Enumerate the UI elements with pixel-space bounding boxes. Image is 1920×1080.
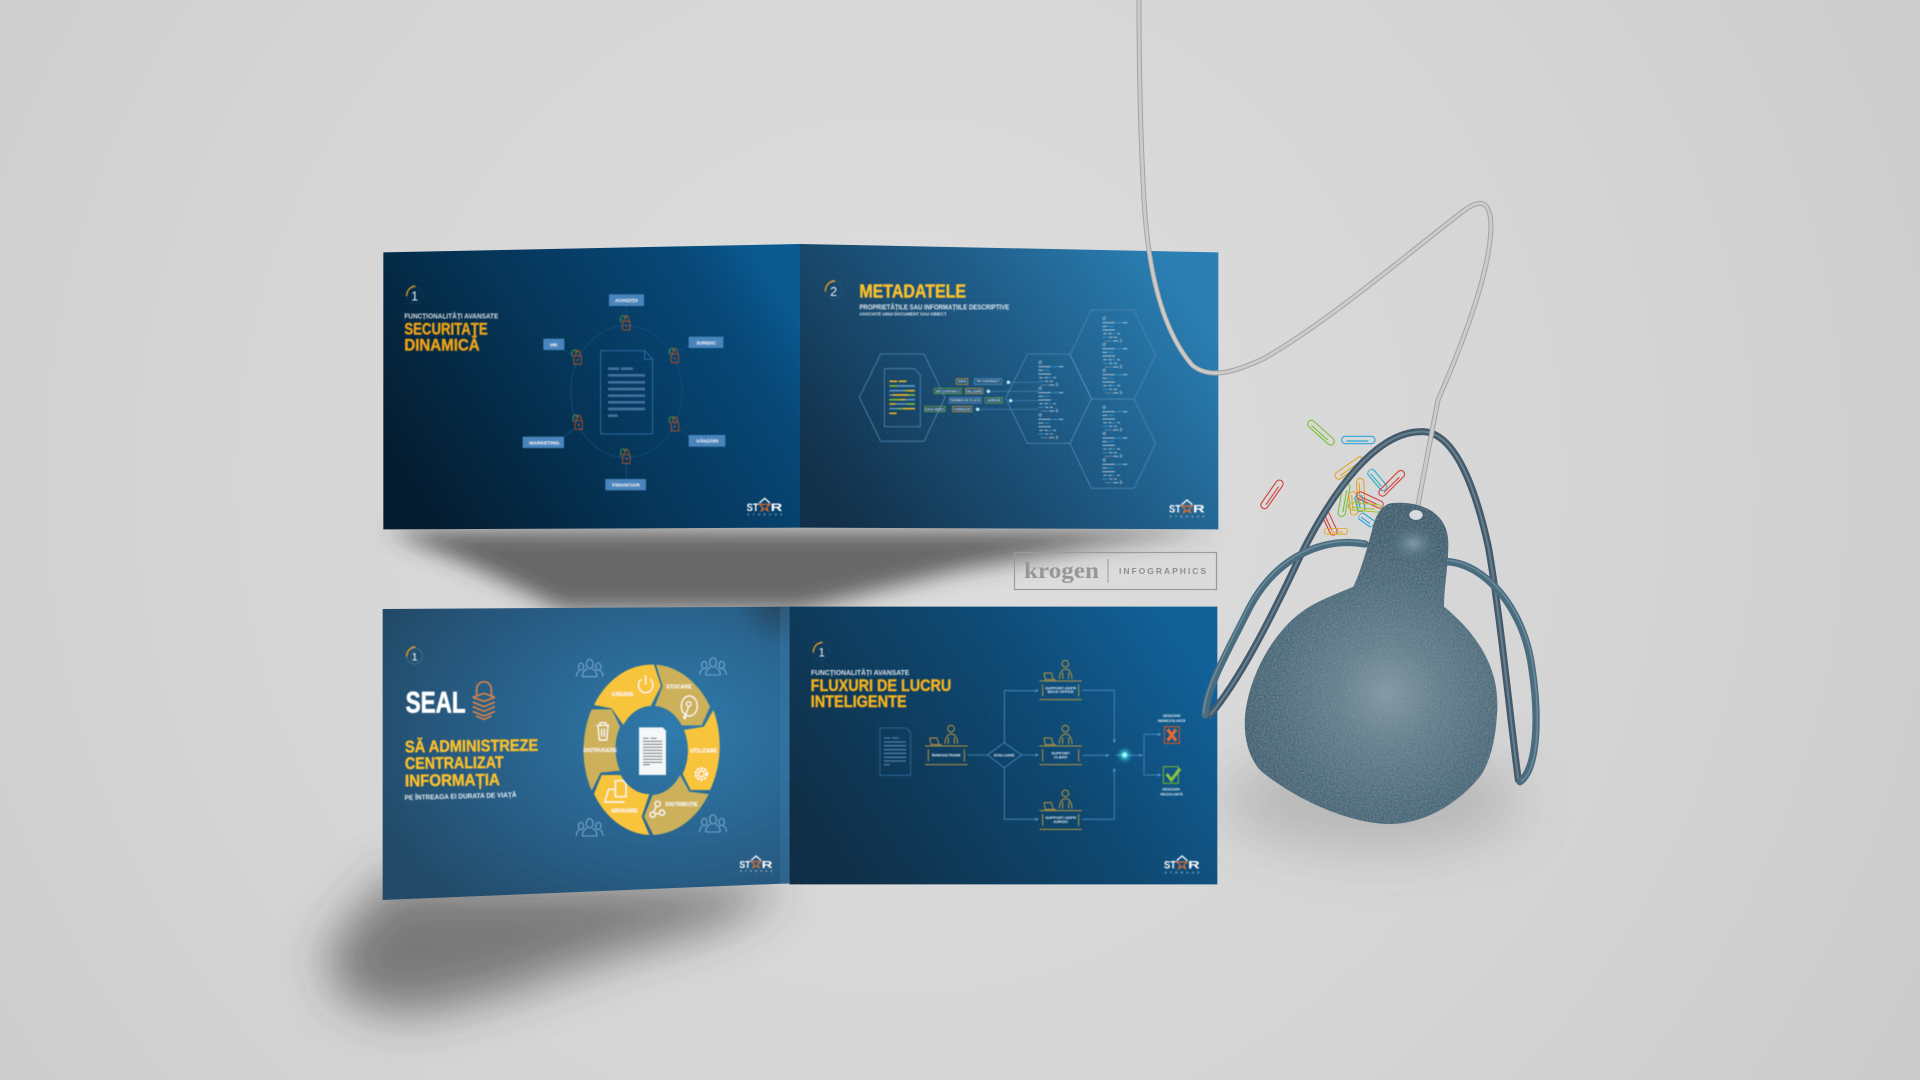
panel: metadatele xyxy=(800,244,1218,529)
flowchart: SESIZARI xyxy=(1162,787,1180,791)
number badge: 2 xyxy=(830,285,837,299)
logo: star storage: R xyxy=(1193,504,1205,516)
logo: star storage: STORAGE xyxy=(747,513,782,517)
diagram: metadata hexagons: TIP CONTRACT xyxy=(976,380,1000,384)
diagram: metadata hexagons: DATA xyxy=(958,380,967,384)
panel: securitate dinamica xyxy=(383,244,800,529)
heading: SECURITAȚE xyxy=(404,319,488,338)
chart: lifecycle ring: STOCARE xyxy=(666,684,692,690)
icon: document xyxy=(601,351,653,434)
number badge xyxy=(407,647,423,664)
icon: central document xyxy=(639,727,666,775)
icon: power xyxy=(638,675,653,693)
number badge: 1 xyxy=(412,652,418,664)
icon: gear xyxy=(696,768,707,780)
heading xyxy=(811,668,951,711)
number badge: 1 xyxy=(818,646,825,660)
heading xyxy=(404,312,498,354)
icon: disk xyxy=(681,696,697,718)
left handle xyxy=(1204,541,1365,715)
lamp xyxy=(1204,503,1537,824)
diagram: document access ring: FINANCIAR xyxy=(612,483,640,489)
heading: INTELIGENTE xyxy=(811,692,907,711)
neck highlight xyxy=(1387,523,1440,563)
logo: star storage: R xyxy=(771,502,782,514)
logo: star storage: ST xyxy=(747,502,759,514)
flowchart: ÎNREGISTRARE xyxy=(931,752,961,757)
shadow: lamp xyxy=(1220,750,1520,850)
flowchart: NEREZOLVATĂ xyxy=(1158,718,1186,723)
lamp body xyxy=(1245,503,1497,824)
panel: seal xyxy=(383,607,789,900)
socket xyxy=(1409,510,1423,520)
diagram: document access ring: HR xyxy=(550,342,558,348)
watermark: krogen infographics: INFOGRAPHICS xyxy=(1119,566,1206,576)
chart: lifecycle ring: UTILIZARE xyxy=(690,749,718,755)
icon: rejected xyxy=(1164,727,1179,743)
logo: star storage: R xyxy=(1188,860,1200,872)
flowchart: JURIDIC xyxy=(1053,820,1069,824)
logo: star storage: ST xyxy=(739,859,751,871)
diagram: metadata hexagons: DATA INDEX xyxy=(925,407,945,411)
lamp back wire xyxy=(1210,432,1518,780)
number badge xyxy=(813,642,830,660)
heading: ASOCIATE UNUI DOCUMENT SAU OBIECT xyxy=(859,312,947,317)
flowchart: BACK OFFICE xyxy=(1048,690,1074,694)
panel: fluxuri de lucru xyxy=(789,607,1217,884)
chart: lifecycle ring: DISTRIBUȚIE xyxy=(665,802,698,808)
logo: star storage xyxy=(739,856,773,873)
icons: people groups xyxy=(576,658,726,836)
flowchart: SUPPORT-GDPR xyxy=(1045,816,1076,820)
logo: star storage: STORAGE xyxy=(1165,870,1200,874)
logo: star storage: ST xyxy=(1164,860,1176,872)
icon: trash xyxy=(597,723,609,740)
logo: star storage: ST xyxy=(1169,504,1181,516)
heading: administration xyxy=(405,736,538,790)
flowchart: CLIENT xyxy=(1054,755,1068,759)
shadow: between brochures xyxy=(385,530,1218,610)
number badge xyxy=(406,286,423,304)
flowchart: SUPPORT-GDPR xyxy=(1045,686,1076,690)
heading xyxy=(859,281,1009,317)
subtitle: PE ÎNTREAGA EI DURATA DE VIAȚĂ xyxy=(404,790,517,802)
chart: lifecycle ring: CREARE xyxy=(612,692,634,698)
heading: seal: SEAL xyxy=(406,687,466,720)
heading: administration: CENTRALIZAT xyxy=(405,753,504,773)
right handle xyxy=(1447,560,1537,782)
chart: lifecycle ring: ARHIVARE xyxy=(611,809,638,815)
diagram: metadata hexagons: FURNIZOR xyxy=(954,407,971,411)
watermark: krogen infographics: krogen xyxy=(1024,558,1099,583)
paper clips xyxy=(1259,419,1406,536)
flowchart: SUPPORT xyxy=(1051,752,1071,756)
heading: PROPRIETĂȚILE SAU INFORMAȚIILE DESCRIPTIVE xyxy=(859,302,1009,311)
heading: METADATELE xyxy=(859,281,966,302)
logo: star storage: R xyxy=(762,859,773,871)
diagram: document access ring: ACHIZIȚII xyxy=(615,298,638,304)
diagram: metadata hexagons: ADRESĂ xyxy=(987,398,1001,403)
diagram: document access ring: VÂNZĂRI xyxy=(696,438,719,445)
diagram: document access ring: MARKETING xyxy=(529,440,560,446)
icon: archive documents xyxy=(605,781,626,802)
heading: FLUXURI DE LUCRU xyxy=(811,676,951,695)
logo: star storage xyxy=(1169,500,1205,518)
flowchart: SESIZARI xyxy=(1163,714,1180,718)
icon: layered lock xyxy=(473,682,495,719)
spine strip: seal panel edge xyxy=(780,607,789,884)
diagram: metadata hexagons: NR. CONTRACT xyxy=(936,389,960,393)
flowchart xyxy=(880,660,1186,829)
icon: nodes xyxy=(650,801,665,817)
shadow: under bottom brochure xyxy=(325,880,789,1015)
heading: administration: INFORMAȚIA xyxy=(405,770,500,790)
diagram: metadata hexagons xyxy=(859,310,1156,488)
chart: lifecycle ring xyxy=(576,658,726,836)
chart: lifecycle ring: DISTRUGERE xyxy=(583,748,618,754)
diagram: metadata hexagons: TERMEN DE PLATĂ xyxy=(950,398,981,403)
number badge xyxy=(825,281,842,299)
diagram: metadata hexagons: VALOARE xyxy=(966,389,982,393)
heading: administration: SĂ ADMINISTREZE xyxy=(405,736,538,756)
logo: star storage xyxy=(747,498,782,517)
diagram: document access ring: JURIDIC xyxy=(696,340,716,346)
number badge: 1 xyxy=(411,290,418,304)
logo: star storage: STORAGE xyxy=(1170,514,1205,518)
heading: FUNCȚIONALITĂȚI AVANSATE xyxy=(811,668,909,677)
icon: resolved xyxy=(1163,767,1180,783)
icon: glowing node xyxy=(1120,750,1129,760)
logo: star storage: STORAGE xyxy=(740,869,773,873)
flowchart: EVALUARE xyxy=(994,753,1015,757)
diagram: document access ring xyxy=(523,294,725,490)
heading: DINAMICĂ xyxy=(404,335,480,354)
watermark: krogen infographics xyxy=(1014,552,1216,590)
icon: document xyxy=(880,728,911,775)
logo: star storage xyxy=(1164,856,1200,874)
flowchart: REZOLVATĂ xyxy=(1160,791,1183,796)
heading: FUNCȚIONALITĂȚI AVANSATE xyxy=(404,312,498,321)
cable xyxy=(1139,0,1491,510)
